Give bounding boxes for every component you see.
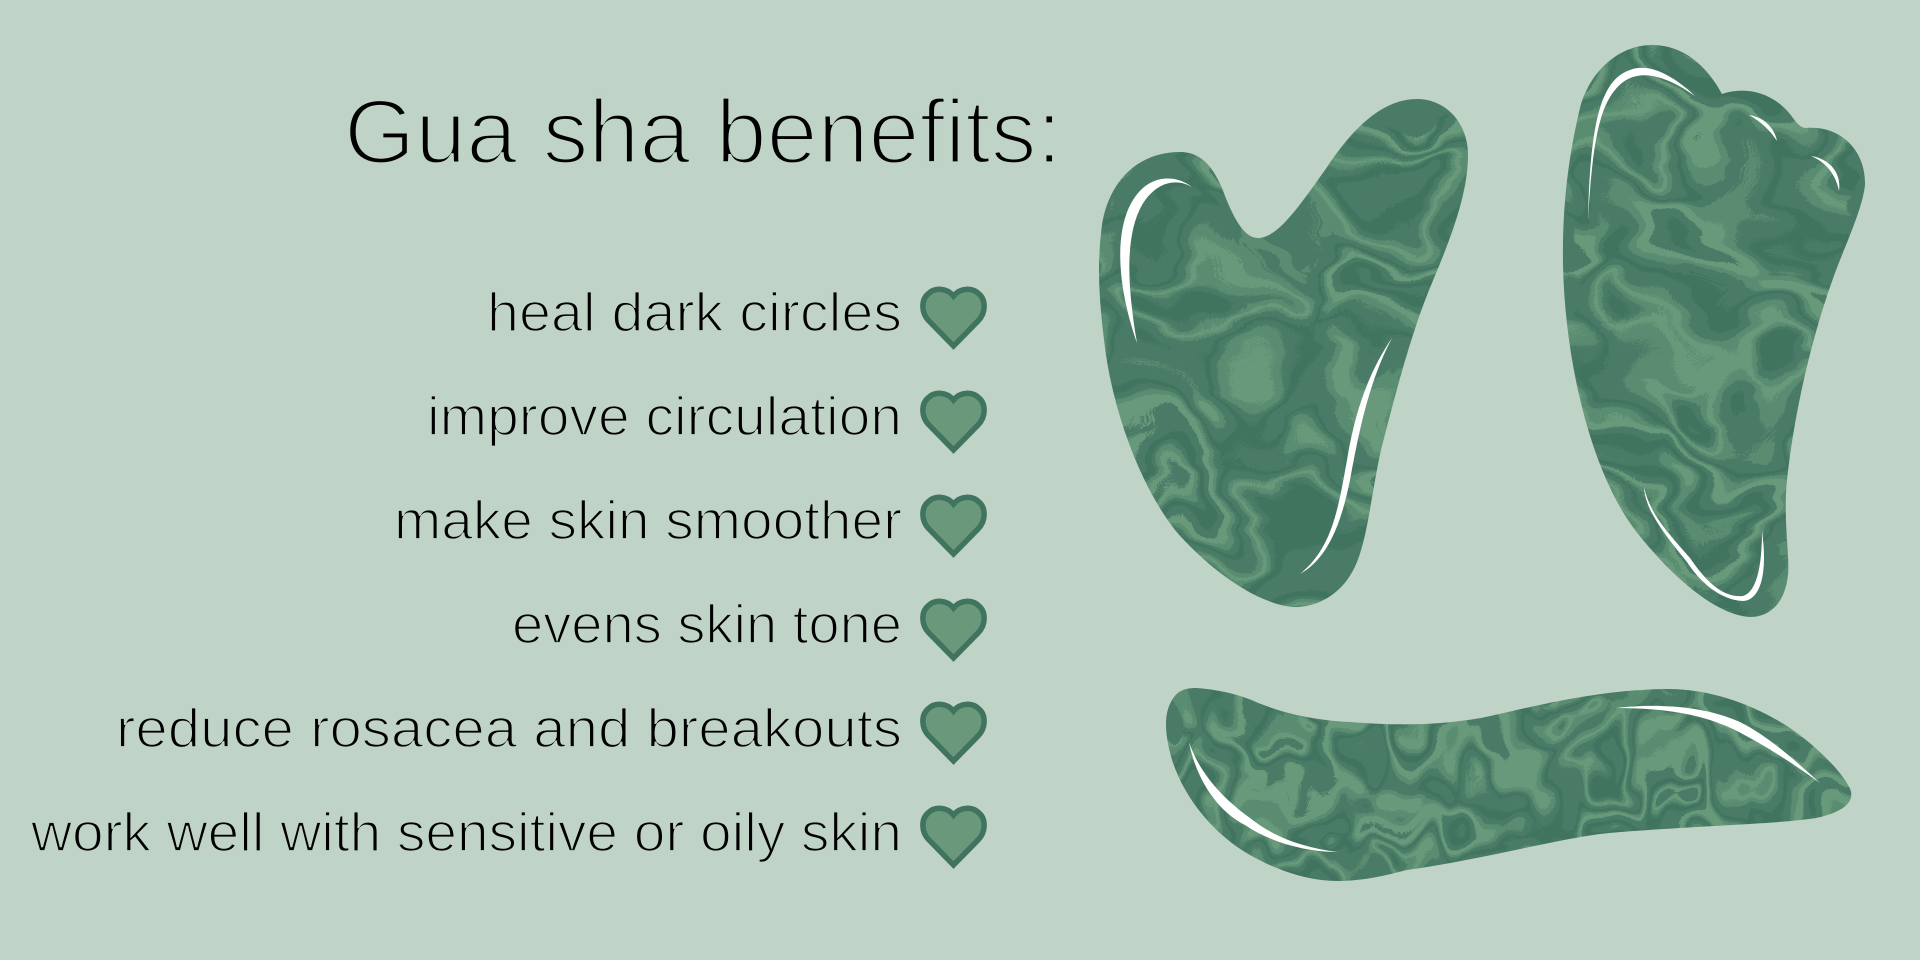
gua sha stone: heart-shaped xyxy=(1090,90,1480,615)
marble texture: long stone xyxy=(1160,680,1860,885)
highlight: right edge xyxy=(1300,338,1392,574)
marble texture: heart-shaped stone xyxy=(1090,90,1480,615)
benefit: evens skin tone: evens skin tone xyxy=(512,593,902,655)
benefits list xyxy=(30,281,984,865)
highlight: left arc xyxy=(1189,742,1338,852)
highlight: bottom curve xyxy=(1644,487,1764,601)
title: Gua sha benefits: xyxy=(344,82,1062,183)
benefit: heal dark circles: heal dark circles xyxy=(487,281,902,343)
highlight: right tooth xyxy=(1811,156,1839,191)
highlight: middle tooth xyxy=(1749,115,1777,141)
benefit: work well with sensitive or oily skin: work well with sensitive or oily skin xyxy=(30,801,902,863)
highlight: left lobe xyxy=(1120,179,1192,343)
gua sha stone: comb-edged xyxy=(1555,40,1870,625)
gua sha stone: long wavy xyxy=(1160,680,1860,885)
benefit: improve circulation: improve circulation xyxy=(427,385,902,447)
benefit: reduce rosacea and breakouts: reduce rosacea and breakouts xyxy=(116,697,902,759)
icon: heart 6 xyxy=(923,808,984,865)
icon: heart 3 xyxy=(923,497,984,554)
benefit: make skin smoother: make skin smoother xyxy=(394,489,902,551)
highlight: long top arc xyxy=(1588,68,1695,221)
highlight: right arc xyxy=(1616,706,1820,783)
icon: heart 2 xyxy=(923,393,984,450)
icon: heart 1 xyxy=(923,289,984,346)
icon: heart 5 xyxy=(923,704,984,761)
marble texture: comb-edged stone xyxy=(1555,40,1870,625)
icon: heart 4 xyxy=(923,601,984,658)
